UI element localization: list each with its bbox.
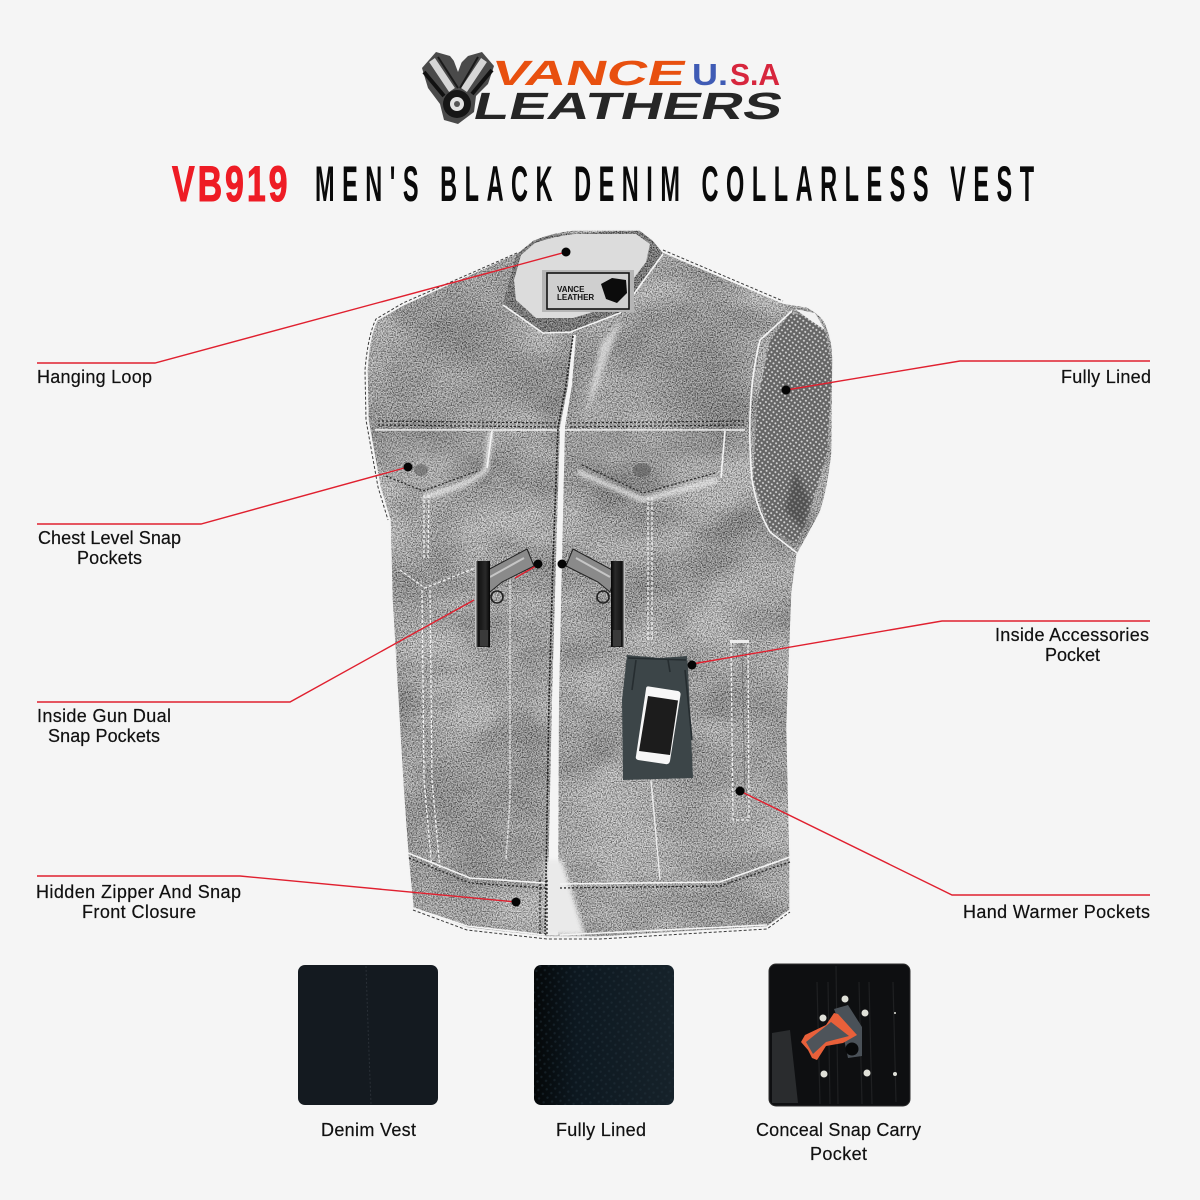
mesh armhole lining	[753, 313, 832, 543]
panel: denim vest swatch	[298, 965, 438, 1140]
callout: inside gun dual snap pockets	[37, 560, 566, 746]
callout: fully lined	[782, 361, 1151, 394]
callout: hand warmer pockets	[736, 786, 1150, 922]
callout: inside accessories pocket	[688, 621, 1150, 670]
callout: inside gun dual snap pockets: Inside Gun Dual	[37, 706, 171, 726]
panel: denim vest swatch: Denim Vest	[321, 1120, 416, 1140]
callout: hanging loop: Hanging Loop	[37, 367, 152, 387]
callout: hidden zipper and snap front closure: Hidden Zipper And Snap	[36, 882, 241, 902]
product name: MEN'S BLACK DENIM COLLARLESS VEST	[315, 157, 1034, 213]
wordmark: U.S.A	[692, 57, 780, 92]
wordmark: Vance: VANCE	[488, 53, 691, 93]
icon: smartphone	[636, 686, 681, 764]
neck label: LEATHER	[557, 293, 594, 302]
wordmark: Leathers: LEATHERS	[469, 86, 788, 128]
panel: fully lined swatch: Fully Lined	[556, 1120, 646, 1140]
callout: chest level snap pockets: Chest Level Snap	[38, 528, 181, 548]
vest body	[360, 225, 840, 940]
seams and stitching	[375, 421, 745, 880]
neck label: VANCE	[557, 285, 585, 294]
wordmark: U.S.A: S.A	[730, 57, 780, 92]
center front placket	[545, 335, 585, 935]
callout: chest level snap pockets: Pockets	[77, 548, 142, 568]
callout: hand warmer pockets: Hand Warmer Pockets	[963, 902, 1150, 922]
inside accessories pouch	[622, 655, 693, 780]
callout: chest level snap pockets	[37, 462, 412, 568]
product code: VB919	[172, 157, 288, 213]
callout: inside accessories pocket: Pocket	[1045, 645, 1100, 665]
callout: hidden zipper and snap front closure	[36, 876, 520, 922]
callout: inside gun dual snap pockets: Snap Pockets	[48, 726, 160, 746]
vest outline	[367, 230, 833, 937]
wordmark: U.S.A: U.	[692, 57, 728, 92]
vest illustration	[360, 225, 840, 940]
icon: v-twin engine	[422, 52, 494, 124]
callout: inside accessories pocket: Inside Accessories	[995, 625, 1149, 645]
callout: hanging loop	[37, 248, 570, 387]
neck lining	[514, 234, 650, 318]
icon: compact pistol	[801, 1005, 862, 1060]
panel: conceal snap carry pocket swatch	[756, 964, 921, 1164]
chest pocket flaps	[375, 430, 725, 500]
panel: conceal snap carry pocket swatch: Conceal Snap Carry	[756, 1120, 921, 1140]
right inside gun	[566, 549, 625, 647]
neck label	[542, 270, 634, 312]
brand logo: Vance Leathers USA	[422, 52, 788, 128]
callout: hidden zipper and snap front closure: Front Closure	[82, 902, 196, 922]
waistband	[408, 853, 790, 935]
panel: conceal snap carry pocket swatch: Pocket	[810, 1144, 867, 1164]
panel: fully lined swatch	[534, 965, 674, 1140]
title	[172, 157, 1034, 213]
left inside gun	[475, 549, 534, 647]
hand warmer pocket	[730, 640, 749, 820]
pocket fabric	[772, 1030, 798, 1103]
callout: fully lined: Fully Lined	[1061, 367, 1151, 387]
snaps	[820, 996, 897, 1078]
